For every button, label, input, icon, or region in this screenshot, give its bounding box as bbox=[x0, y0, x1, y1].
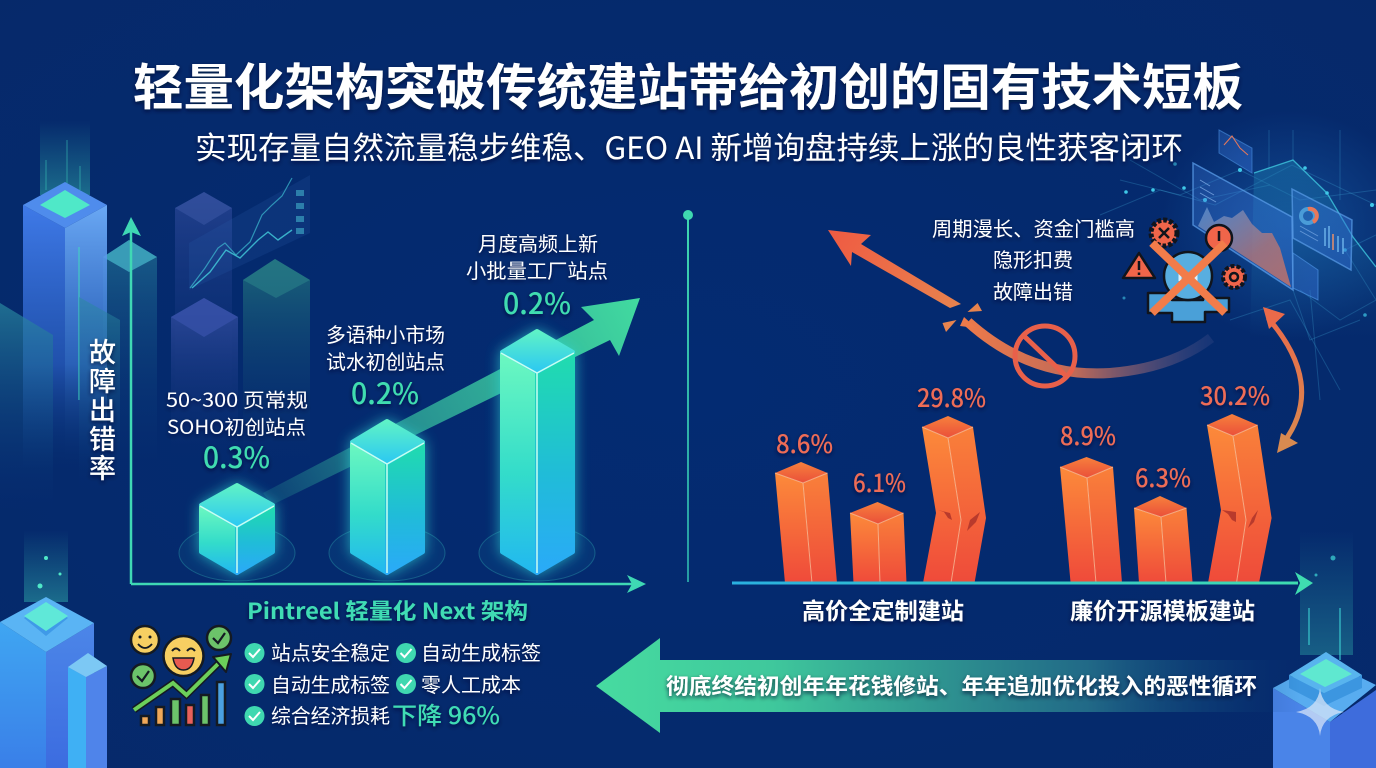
label: SOHO sites: SOHO初创站点 bbox=[167, 411, 306, 440]
text: problem list: 故障出错 bbox=[993, 276, 1073, 305]
text: problem list bbox=[932, 213, 1135, 305]
y axis label: 障 bbox=[89, 360, 116, 399]
y axis label: 率 bbox=[89, 447, 116, 486]
icon: four-point star bbox=[1296, 688, 1344, 736]
label: high-priced custom site: 高价全定制建站 bbox=[802, 592, 964, 626]
value labels: 30.2% bbox=[1200, 377, 1270, 413]
heading: Pintreel architecture: Pintreel 轻量化 Next 架构 bbox=[247, 594, 528, 626]
decoration: left isometric towers bbox=[0, 120, 310, 510]
decoration: bottom-right tower bbox=[1273, 530, 1376, 768]
bar: SOHO sites bbox=[179, 483, 295, 581]
y axis label: 出 bbox=[89, 389, 116, 428]
arrow: red up-left bbox=[828, 230, 961, 308]
label: cheap open-source template site: 廉价开源模板建站 bbox=[1070, 592, 1255, 626]
bar: multilingual sites bbox=[329, 419, 445, 581]
decoration: bottom-left towers bbox=[0, 530, 107, 768]
bar: custom 8.6% bbox=[775, 462, 837, 583]
arrow: broken curved band bbox=[942, 303, 1211, 373]
bar: template 6.3% bbox=[1134, 496, 1193, 583]
label: multilingual sites bbox=[326, 319, 445, 413]
label: multilingual sites: 多语种小市场 bbox=[326, 319, 445, 348]
item: economic loss down 96%: 综合经济损耗 bbox=[271, 700, 390, 729]
y axis label: 错 bbox=[89, 418, 116, 457]
item: no labour cost: 零人工成本 bbox=[421, 669, 521, 698]
item: auto tags: 自动生成标签 bbox=[421, 637, 541, 666]
label: SOHO sites bbox=[166, 384, 308, 477]
list: benefits bbox=[244, 637, 541, 731]
bar: template 30.2% broken bbox=[1207, 414, 1272, 583]
text: problem list: 周期漫长、资金门槛高 bbox=[932, 213, 1135, 242]
label: factory sites: 小批量工厂站点 bbox=[466, 255, 608, 284]
label: multilingual sites: 0.2% bbox=[351, 371, 419, 413]
bar: template 8.9% bbox=[1060, 457, 1122, 583]
panel: traditional sites bbox=[732, 377, 1313, 626]
callout: big green arrow: 彻底终结初创年年花钱修站、年年追加优化投入的恶性循环 bbox=[666, 669, 1257, 701]
value labels: 8.9% bbox=[1060, 417, 1116, 453]
label: SOHO sites: 50~300 页常规 bbox=[166, 384, 308, 413]
y axis label: 故 bbox=[89, 331, 116, 370]
item: auto tags repeat: 自动生成标签 bbox=[271, 669, 390, 698]
item: economic loss down 96% bbox=[244, 696, 500, 731]
bar: custom 6.1% bbox=[850, 502, 906, 583]
value labels: 8.6% bbox=[776, 425, 833, 461]
icon: prohibition sign bbox=[1015, 326, 1075, 386]
label: factory sites bbox=[466, 228, 608, 323]
value labels bbox=[776, 377, 1270, 500]
label: SOHO sites: 0.3% bbox=[203, 435, 270, 477]
subtitle: 实现存量自然流量稳步维稳、GEO AI 新增询盘持续上涨的良性获客闭环 bbox=[195, 123, 1183, 168]
label: factory sites: 0.2% bbox=[503, 281, 571, 323]
title: 轻量化架构突破传统建站带给初创的固有技术短板 bbox=[133, 48, 1243, 120]
item: site stability: 站点安全稳定 bbox=[271, 637, 390, 666]
value labels: 6.1% bbox=[853, 464, 906, 500]
axis: right chart bbox=[732, 572, 1313, 595]
icon: smileys and growth chart bbox=[131, 626, 231, 725]
y axis label bbox=[89, 331, 116, 486]
callout: big green arrow bbox=[596, 638, 1300, 733]
bar: custom 29.8% broken bbox=[922, 416, 986, 583]
value labels: 6.3% bbox=[1135, 459, 1191, 495]
text: problem list: 隐形扣费 bbox=[993, 244, 1073, 273]
divider bbox=[683, 210, 693, 582]
panel: lightweight architecture chart bbox=[89, 217, 646, 626]
arrow: two-way curved bbox=[1263, 307, 1302, 453]
label: multilingual sites: 试水初创站点 bbox=[326, 346, 445, 375]
icon: broken tech crossed out bbox=[1123, 220, 1245, 322]
trend arrow bbox=[263, 298, 640, 505]
value labels: 29.8% bbox=[917, 379, 986, 415]
decoration: translucent line chart panel bbox=[189, 175, 310, 290]
item: economic loss down 96%: 下降 96% bbox=[392, 696, 500, 731]
decoration: dashboards and network top right bbox=[1100, 110, 1376, 400]
bar: factory sites bbox=[479, 329, 595, 581]
chart axes bbox=[122, 217, 646, 593]
label: factory sites: 月度高频上新 bbox=[478, 228, 598, 257]
